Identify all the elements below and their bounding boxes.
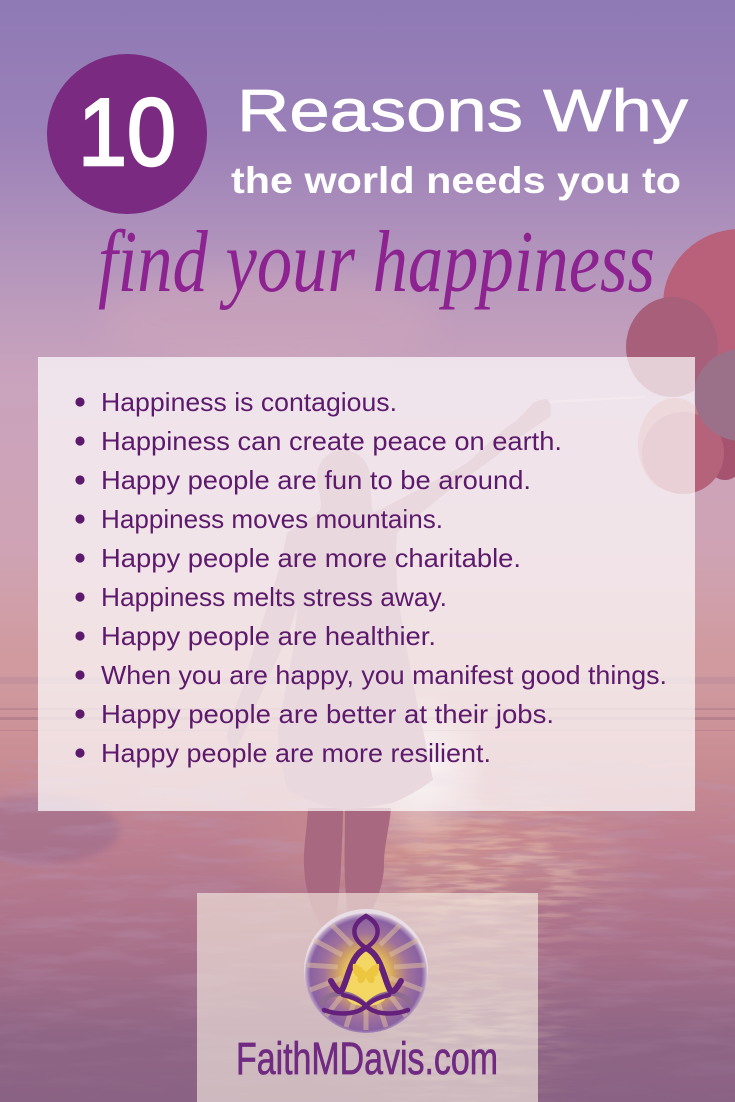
badge: purple circle with number 10: 10 (78, 79, 176, 186)
panel: reasons list background (38, 357, 695, 811)
reason 9: Happy people are better at their jobs. (101, 699, 554, 729)
reason 4: Happiness moves mountains. (101, 504, 443, 534)
icon: butterfly (353, 964, 379, 983)
heading: Reasons Why: Reasons Why (237, 78, 689, 144)
reason 6: Happiness melts stress away. (101, 582, 447, 612)
icon: meditating figure logo (304, 909, 428, 1033)
balloons (547, 229, 735, 494)
panel: footer background (197, 893, 538, 1102)
woman silhouette (227, 399, 551, 936)
subheading: the world needs you to: the world needs you to (231, 160, 681, 201)
reason 5: Happy people are more charitable. (101, 543, 521, 573)
reason 8: When you are happy, you manifest good things. (101, 660, 667, 690)
list: ten reasons (75, 387, 667, 768)
reason 1: Happiness is contagious. (101, 387, 397, 417)
reason 7: Happy people are healthier. (101, 621, 436, 651)
footer site name: FaithMDavis.com (236, 1033, 498, 1084)
reason 3: Happy people are fun to be around. (101, 465, 531, 495)
reason 10: Happy people are more resilient. (101, 738, 491, 768)
badge: purple circle with number 10 (47, 54, 207, 214)
reason 2: Happiness can create peace on earth. (101, 426, 562, 456)
